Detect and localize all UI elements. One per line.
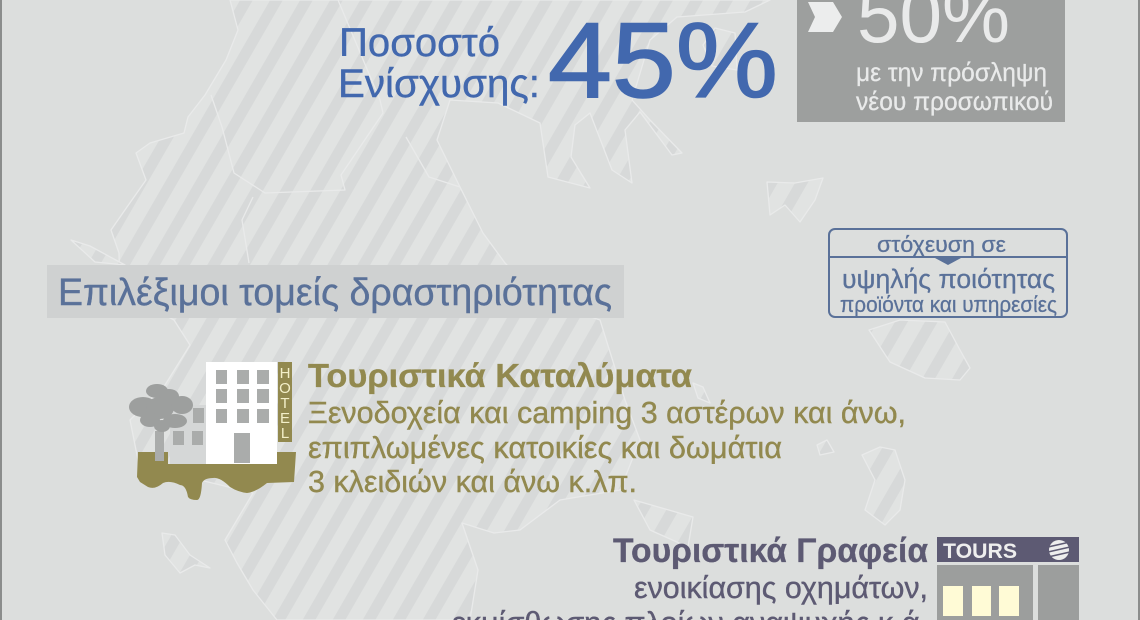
section heading: eligible sectors: Επιλέξιμοι τομείς δραστηριότητας (58, 272, 612, 314)
back building (170, 405, 207, 464)
icon: chevron arrow (808, 2, 842, 32)
icon: hotel: T (280, 395, 290, 412)
icon: tours office: TOURS (943, 540, 1017, 563)
panel caption: με την πρόσληψη (856, 57, 1047, 87)
icon: tours office (937, 537, 1079, 620)
panel: 50% with new staff hiring (797, 0, 1065, 122)
text block: travel agencies (452, 532, 928, 620)
callout: targeting high quality (829, 229, 1067, 317)
heading: aid percentage: 45% (548, 0, 778, 120)
text block: travel agencies: ενοικίασης οχημάτων, (634, 570, 928, 605)
text block: tourist accommodation: Τουριστικά Καταλύματα (308, 357, 692, 394)
text block: tourist accommodation: επιπλωμένες κατοικίες και δωμάτια (308, 430, 782, 465)
panel caption (856, 57, 1053, 116)
icon: hotel: L (281, 425, 289, 442)
icon: hotel: H (280, 365, 290, 382)
map of Greece background (71, 0, 970, 620)
text block: travel agencies: Τουριστικά Γραφεία (613, 532, 928, 570)
heading: aid percentage: Ενίσχυσης: (338, 62, 540, 106)
main building (206, 362, 277, 464)
text block: tourist accommodation: Ξενοδοχεία και camping 3 αστέρων και άνω, (308, 395, 906, 430)
text block: tourist accommodation: 3 κλειδιών και άνω κ.λπ. (308, 464, 637, 499)
callout: targeting high quality: προϊόντα και υπηρεσίες (840, 292, 1057, 317)
heading: aid percentage: Ποσοστό (339, 21, 500, 65)
callout: targeting high quality: υψηλής ποιότητας (842, 264, 1055, 294)
icon: hotel: E (280, 410, 290, 427)
hotel sign (278, 362, 292, 442)
text block: tourist accommodation (308, 357, 906, 499)
icon: hotel (129, 362, 296, 500)
icon: hotel: O (279, 380, 291, 397)
panel caption: νέου προσωπικού (856, 86, 1053, 116)
heading: aid percentage (338, 0, 778, 120)
tree (129, 384, 193, 461)
icon: globe (1048, 540, 1070, 560)
callout: targeting high quality: στόχευση σε (877, 232, 1006, 257)
ground (137, 452, 296, 500)
